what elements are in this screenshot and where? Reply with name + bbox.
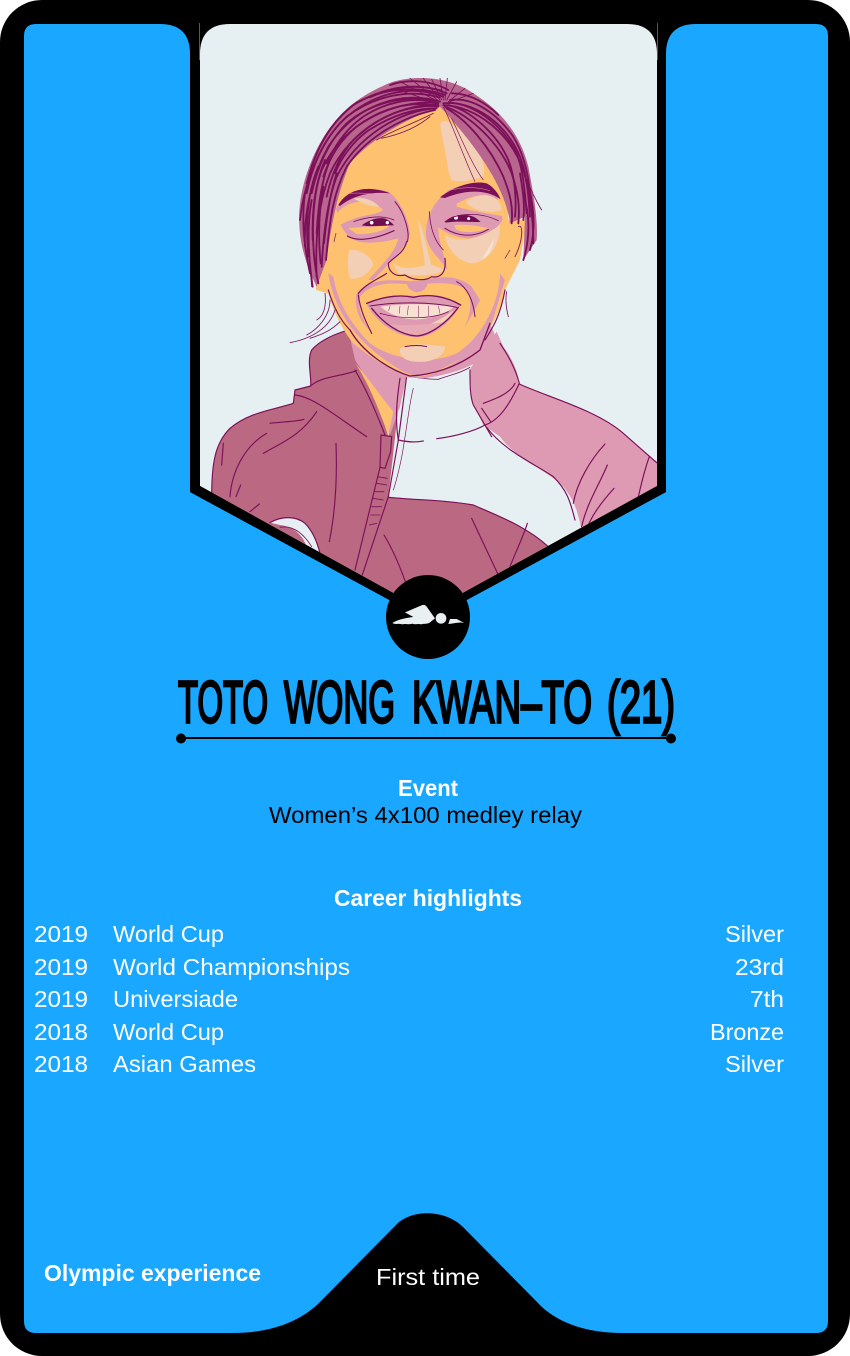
career highlights table: Silver: [725, 1051, 784, 1077]
event name: Women’s 4x100 medley relay: [269, 802, 582, 828]
face and hair: [290, 78, 542, 378]
career highlights table: Universiade: [113, 986, 238, 1012]
career highlights table: 2018: [34, 1051, 88, 1077]
name heading: WONG: [284, 670, 395, 736]
right eye socket: [426, 186, 503, 270]
career highlights table: 23rd: [735, 954, 784, 980]
neck shadow: [384, 326, 495, 378]
sport badge: swimming: [386, 575, 470, 659]
career highlights table: 2019: [34, 986, 88, 1012]
forehead and chin highlights: [400, 121, 484, 362]
lower lip patch: [387, 322, 447, 335]
career highlights table: World Championships: [113, 954, 350, 980]
name heading: [178, 670, 675, 736]
career highlights table: World Cup: [113, 921, 224, 947]
name heading: KWAN–TO: [412, 670, 592, 736]
career highlights table: 2018: [34, 1019, 88, 1045]
right upper lid: [457, 195, 502, 216]
career highlights table: Silver: [725, 921, 784, 947]
olympic experience label: Olympic experience: [44, 1260, 261, 1286]
eyes: [362, 218, 394, 226]
jaw and mouth shadows: [328, 273, 505, 377]
heading underline: [176, 734, 676, 744]
mouth and jaw lines: [328, 226, 522, 376]
eye and nose lines: [334, 202, 510, 280]
jacket: [212, 330, 658, 617]
career highlights table: Bronze: [710, 1019, 784, 1045]
career highlights table: 7th: [750, 986, 784, 1012]
olympic experience value: First time: [376, 1264, 480, 1290]
career highlights table: [34, 921, 784, 1077]
left upper lid: [337, 202, 383, 225]
brows: [338, 189, 390, 206]
cheek highlights: [445, 225, 500, 263]
right under eye: [454, 225, 488, 232]
portrait frame chevron edge: [190, 486, 666, 602]
fringe strand over forehead: [443, 107, 483, 182]
portrait illustration: [200, 24, 658, 617]
left eye socket: [336, 189, 410, 280]
nose highlights: [418, 220, 434, 275]
hair: [290, 78, 542, 343]
name heading: TOTO: [178, 670, 268, 736]
career highlights table: 2019: [34, 921, 88, 947]
left under eye: [348, 225, 390, 234]
career highlights heading: Career highlights: [334, 885, 522, 911]
name heading: (21): [607, 670, 675, 736]
icon: swimmer: [392, 605, 464, 624]
event label: Event: [398, 775, 458, 801]
skin: [315, 107, 527, 377]
career highlights table: World Cup: [113, 1019, 224, 1045]
career highlights table: Asian Games: [113, 1051, 256, 1077]
career highlights table: 2019: [34, 954, 88, 980]
eye region: [334, 182, 510, 280]
teeth: [381, 304, 454, 319]
